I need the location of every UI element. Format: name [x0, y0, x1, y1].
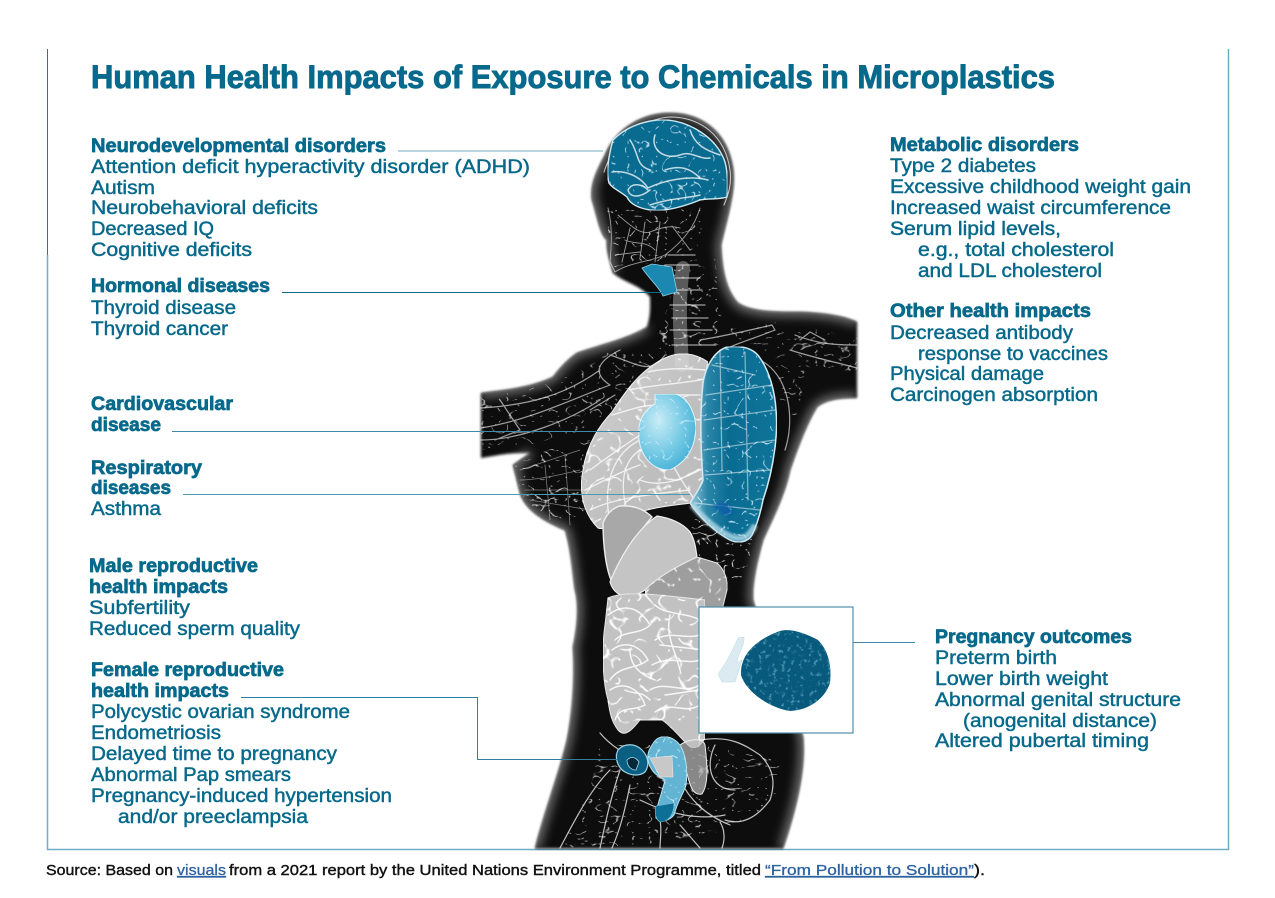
breast tissue — [515, 440, 590, 520]
text: metabolic disorders: e.g., total cholesterol — [918, 240, 1114, 261]
stomach highlight band — [610, 516, 697, 596]
text: neurodevelopmental disorders: Neurodevelopmental disorders — [91, 136, 386, 157]
text: female reproductive health impacts: Pregnancy-induced hypertension — [91, 786, 392, 807]
pelvis bones — [560, 733, 773, 848]
skull lines — [608, 208, 700, 272]
lung lower pale edge — [692, 505, 755, 538]
text: metabolic disorders: and LDL cholesterol — [918, 261, 1102, 282]
text: male reproductive health impacts: Reduced sperm quality — [89, 619, 301, 640]
text: neurodevelopmental disorders: Cognitive deficits — [91, 240, 252, 261]
text: pregnancy outcomes: (anogenital distance) — [963, 711, 1157, 732]
text: female reproductive health impacts: Female reproductive — [91, 660, 284, 681]
title: Human Health Impacts of Exposure to Chemicals in Microplastics — [91, 59, 1055, 95]
body rim glow — [481, 113, 857, 848]
text: hormonal diseases: Hormonal diseases — [91, 276, 270, 297]
ovary — [616, 745, 648, 775]
text: female reproductive health impacts: Polycystic ovarian syndrome — [91, 702, 350, 723]
text: respiratory diseases: Asthma — [91, 499, 161, 520]
text: female reproductive health impacts: Endometriosis — [91, 723, 221, 744]
text: metabolic disorders: Type 2 diabetes — [890, 156, 1036, 177]
text: respiratory diseases — [91, 458, 202, 520]
body silhouette — [481, 113, 857, 848]
heart — [639, 394, 696, 470]
breast fibres — [520, 450, 590, 525]
neck and shoulder mesh — [650, 255, 725, 360]
text: metabolic disorders — [890, 135, 1191, 282]
text: metabolic disorders: Serum lipid levels, — [890, 219, 1061, 240]
text: respiratory diseases: diseases — [91, 478, 171, 499]
text: male reproductive health impacts: health impacts — [89, 577, 228, 598]
text: neurodevelopmental disorders: Neurobehavioral deficits — [91, 198, 318, 219]
text: cardiovascular disease: disease — [91, 415, 161, 436]
text: male reproductive health impacts: Subfertility — [89, 598, 191, 619]
skull outline — [604, 117, 731, 205]
text: other health impacts: Carcinogen absorption — [890, 385, 1098, 406]
text: respiratory diseases: Respiratory — [91, 458, 202, 479]
inset: umbilical fragment — [718, 637, 744, 682]
source note: visuals — [177, 862, 226, 879]
text: pregnancy outcomes: Abnormal genital structure — [935, 690, 1181, 711]
ribcage — [581, 354, 708, 529]
reproductive organ — [648, 737, 687, 821]
text: hormonal diseases: Thyroid cancer — [91, 319, 229, 340]
human body illustration — [481, 113, 857, 848]
rib strokes and inner lobe — [585, 369, 705, 520]
text: metabolic disorders: Metabolic disorders — [890, 135, 1079, 156]
text: pregnancy outcomes: Lower birth weight — [935, 669, 1109, 690]
lung lower highlight — [712, 502, 735, 517]
lower blue tip — [655, 803, 674, 822]
intestine loops — [608, 605, 705, 720]
pregnancy inset box — [699, 607, 853, 733]
source note: Source: Based on — [46, 862, 173, 879]
intestines — [603, 594, 705, 748]
text: neurodevelopmental disorders: Autism — [91, 178, 155, 199]
text: female reproductive health impacts — [91, 660, 392, 828]
text: female reproductive health impacts: Abnormal Pap smears — [91, 765, 291, 786]
brain gyri — [612, 130, 720, 205]
sacrum piece — [650, 756, 673, 777]
text: female reproductive health impacts: and/or preeclampsia — [118, 807, 308, 828]
text: neurodevelopmental disorders: Attention deficit hyperactivity disorder (ADHD) — [91, 157, 530, 178]
source note: ). — [974, 862, 985, 879]
text: hormonal diseases — [91, 276, 270, 340]
text: other health impacts: Physical damage — [890, 364, 1044, 385]
text: neurodevelopmental disorders — [91, 136, 530, 261]
source note: from a 2021 report by the United Nations Environment Programme, titled — [229, 862, 761, 879]
inset: placenta — [741, 630, 830, 711]
text: female reproductive health impacts: Delayed time to pregnancy — [91, 744, 338, 765]
text: neurodevelopmental disorders: Decreased IQ — [91, 219, 214, 240]
pelvis mesh — [560, 745, 780, 848]
left arm mesh — [481, 345, 660, 452]
lung radial lines — [695, 350, 775, 510]
text: pregnancy outcomes: Altered pubertal timing — [935, 731, 1149, 752]
text: pregnancy outcomes: Pregnancy outcomes — [935, 627, 1132, 648]
text: hormonal diseases: Thyroid disease — [91, 298, 236, 319]
spine column — [680, 268, 683, 365]
text: female reproductive health impacts: health impacts — [91, 681, 229, 702]
liver and upper organs — [645, 557, 727, 610]
text: other health impacts: response to vaccines — [918, 344, 1108, 365]
brain — [608, 120, 727, 210]
text: metabolic disorders: Increased waist circumference — [890, 198, 1171, 219]
lung — [690, 347, 777, 542]
facial bones mesh — [607, 205, 702, 272]
stomach — [603, 506, 652, 582]
ovary centre — [627, 758, 639, 770]
right arm mesh — [720, 322, 857, 420]
text: other health impacts — [890, 301, 1108, 406]
text: male reproductive health impacts: Male reproductive — [89, 556, 258, 577]
text: cardiovascular disease: Cardiovascular — [91, 394, 234, 415]
text: cardiovascular disease — [91, 394, 234, 436]
lower spine — [680, 740, 707, 794]
text: other health impacts: Other health impacts — [890, 301, 1091, 322]
abdominal web — [690, 515, 755, 590]
text: male reproductive health impacts — [89, 556, 301, 640]
text: other health impacts: Decreased antibody — [890, 323, 1074, 344]
source note: “From Pollution to Solution” — [765, 862, 974, 879]
text: pregnancy outcomes — [935, 627, 1181, 752]
thyroid — [642, 264, 677, 296]
leader lines — [172, 151, 915, 760]
text: pregnancy outcomes: Preterm birth — [935, 648, 1057, 669]
neck vertebrae — [665, 255, 716, 345]
source note — [46, 862, 985, 879]
shoulder girdle and arm bones — [481, 325, 857, 450]
text: metabolic disorders: Excessive childhood weight gain — [890, 177, 1191, 198]
